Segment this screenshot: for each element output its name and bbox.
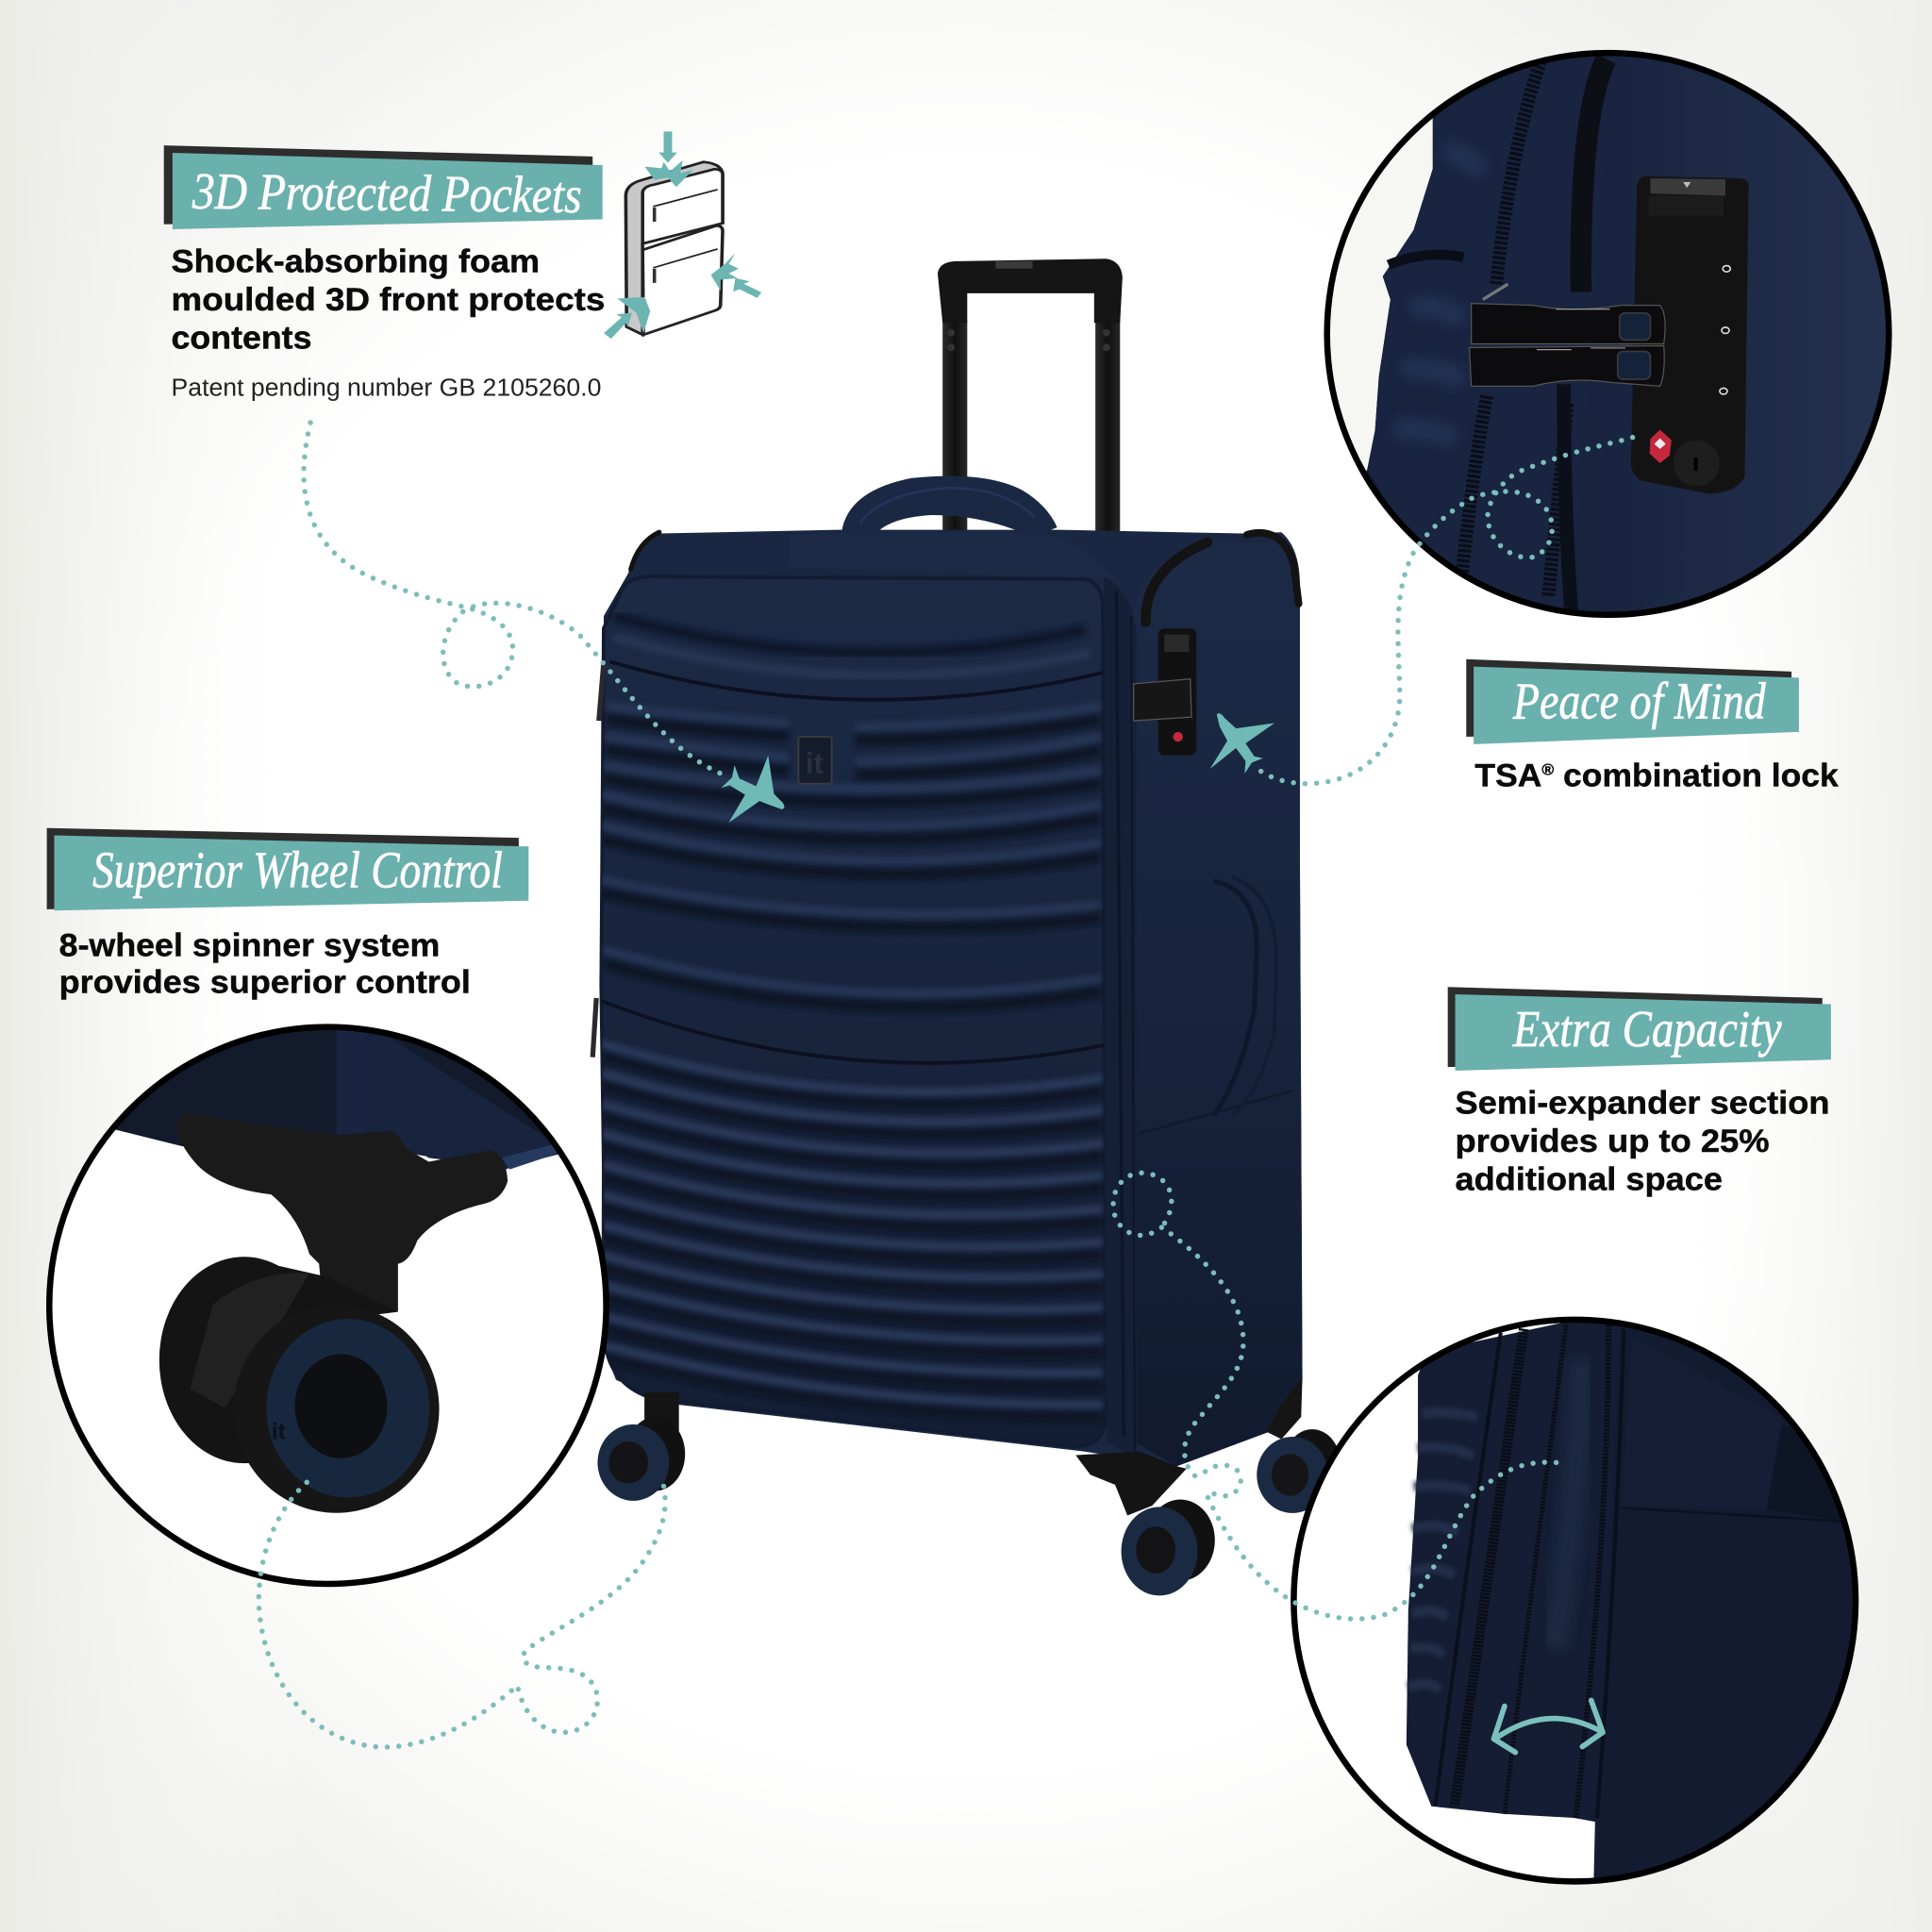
banner xyxy=(1466,659,1799,744)
description: contents xyxy=(172,321,311,357)
banner: Superior Wheel Control xyxy=(92,841,503,898)
side ripples xyxy=(1408,1412,1477,1690)
corner trims xyxy=(631,532,1299,623)
icon: plane on front panel xyxy=(721,756,784,823)
description: 8-wheel spinner system xyxy=(59,928,440,964)
it logo badge xyxy=(798,737,832,784)
front panel with foam ridges xyxy=(592,576,1106,1446)
description xyxy=(1456,1086,1830,1198)
side carry handle xyxy=(1214,877,1276,1115)
icon: compressed luggage with arrows xyxy=(604,131,761,339)
caster bracket xyxy=(176,1113,508,1312)
description xyxy=(172,244,605,357)
suitcase rear body and side face xyxy=(601,530,1303,1466)
caster: front right wheel xyxy=(1075,1452,1215,1595)
description: ® xyxy=(1541,761,1555,779)
circle: expander close-up xyxy=(1293,1302,1877,1906)
description: additional space xyxy=(1456,1162,1723,1198)
banner xyxy=(1448,987,1831,1071)
caster wheel: it xyxy=(272,1419,286,1444)
zip pulls xyxy=(592,661,604,1058)
circle: wheel close-up xyxy=(28,1000,632,1584)
panel: Superior Wheel Control xyxy=(47,828,528,1001)
lock body xyxy=(1631,176,1749,494)
banner xyxy=(164,145,603,229)
carry handle xyxy=(841,476,1058,537)
circle: TSA lock close-up xyxy=(1324,49,1892,618)
panel: 3D Protected Pockets xyxy=(164,145,605,401)
it logo badge: it xyxy=(806,747,824,780)
description: moulded 3D front protects xyxy=(172,282,605,318)
banner: Extra Capacity xyxy=(1512,1000,1782,1058)
caster: left front wheel xyxy=(597,1392,685,1501)
telescopic trolley handle xyxy=(938,258,1123,536)
caster: rear right wheel xyxy=(1257,1377,1341,1513)
caster wheel xyxy=(159,1257,440,1513)
icon: plane on side panel xyxy=(1210,713,1274,774)
dotted route: wheel close-up to caster xyxy=(258,1482,665,1747)
description xyxy=(59,928,471,1001)
description: Semi-expander section xyxy=(1456,1086,1830,1122)
description: Shock-absorbing foam xyxy=(172,244,540,280)
expander zips xyxy=(1435,1325,1624,1818)
dotted route: pockets to plane xyxy=(304,423,727,776)
zip clasp xyxy=(1470,284,1665,386)
panel: Extra Capacity xyxy=(1448,987,1831,1198)
suitcase xyxy=(592,258,1341,1595)
banner: Peace of Mind xyxy=(1512,672,1766,729)
description: provides superior control xyxy=(59,965,471,1001)
panel: Peace of Mind xyxy=(1466,659,1840,793)
description: combination lock xyxy=(1554,758,1839,793)
side TSA lock xyxy=(1134,628,1196,756)
banner: 3D Protected Pockets xyxy=(192,162,582,224)
banner xyxy=(47,828,528,910)
dotted route: lock to plane xyxy=(1255,438,1633,784)
description: provides up to 25% xyxy=(1456,1124,1770,1159)
patent note: Patent pending number GB 2105260.0 xyxy=(172,375,601,401)
dotted route: expander to side panel xyxy=(1113,1173,1557,1619)
arrow: expansion double arrow xyxy=(1493,1700,1603,1753)
description: TSA xyxy=(1474,758,1541,793)
